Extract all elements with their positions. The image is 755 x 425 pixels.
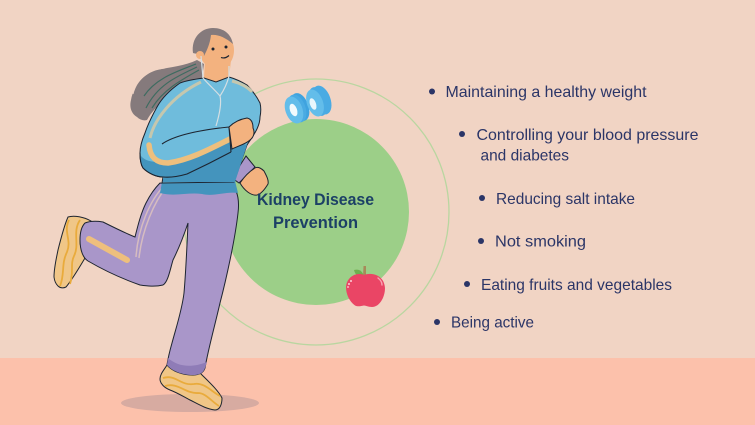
figure: jogging woman [54, 28, 268, 410]
jacket hem band [160, 181, 238, 195]
rear arm [232, 156, 255, 183]
tip: blood pressure and diabetes: Controlling your blood pressure [476, 127, 699, 144]
sleeve lower outline [140, 152, 231, 177]
front shoe [160, 365, 222, 410]
green central circle [223, 119, 409, 305]
tip: blood pressure and diabetes [459, 127, 699, 164]
ground shadow [121, 394, 259, 412]
blue jacket [140, 77, 261, 183]
jacket sleeve shade [141, 140, 247, 182]
hair ponytail [130, 60, 204, 120]
tip: healthy weight: Maintaining a healthy weight [446, 84, 647, 101]
sleeve orange stripe [149, 139, 230, 163]
bullet list: prevention tips [429, 84, 699, 332]
sleeve inner line [162, 127, 231, 152]
trouser cuff shade [167, 358, 207, 375]
trouser side stripes [136, 186, 167, 258]
heading: kidney disease prevention: Prevention [273, 214, 358, 232]
heading: kidney disease prevention [257, 191, 374, 232]
shoulder beige stripe [232, 81, 252, 92]
tip: not smoking: Not smoking [495, 234, 586, 250]
tip: blood pressure and diabetes: and diabetes [480, 148, 569, 164]
heading: kidney disease prevention: Kidney Disease [257, 191, 374, 209]
outer circle outline [183, 79, 449, 345]
icon: dumbbell [281, 83, 335, 126]
sleeve beige stripe [150, 82, 201, 138]
purple trousers [80, 183, 239, 375]
back shoe [54, 216, 91, 288]
tip: being active: Being active [451, 314, 534, 332]
icon: apple [346, 266, 385, 307]
back hand [240, 167, 268, 195]
ground band [0, 358, 755, 425]
tip: fruits and vegetables: Eating fruits and vegetables [481, 277, 672, 294]
neck and face [193, 28, 234, 82]
tip: salt: Reducing salt intake [496, 191, 635, 208]
front hand [229, 118, 254, 149]
earphone cord [201, 56, 229, 126]
trouser knee stripe [89, 239, 127, 260]
